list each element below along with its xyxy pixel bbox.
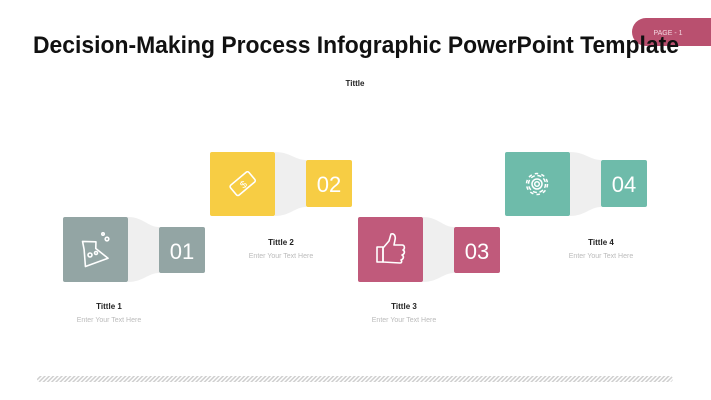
- text: step 4: [569, 238, 633, 260]
- text: step 3: [372, 302, 436, 324]
- text: step 4: Enter Your Text Here: [569, 253, 633, 260]
- text: step 1: Tittle 1: [96, 302, 122, 311]
- step 4: [505, 152, 647, 216]
- text: step 2: [249, 238, 313, 260]
- text: step 3: Tittle 3: [391, 302, 417, 311]
- page badge: [632, 18, 711, 46]
- icon: gear: [526, 174, 548, 194]
- text: step 2: Enter Your Text Here: [249, 253, 313, 260]
- step 4: 04: [612, 172, 636, 197]
- text: step 3: Enter Your Text Here: [372, 317, 436, 324]
- step 3: [358, 217, 500, 282]
- subtitle: Tittle: [346, 79, 365, 88]
- text: step 2: Tittle 2: [268, 238, 294, 247]
- text: step 4: Tittle 4: [588, 238, 614, 247]
- step 1: 01: [170, 239, 194, 264]
- text: step 1: [77, 302, 141, 324]
- page badge: PAGE - 1: [653, 30, 683, 37]
- icon: money: $: [238, 179, 250, 191]
- step 2: 02: [317, 172, 341, 197]
- icon: thumbs up: [377, 234, 404, 263]
- icon: money: [229, 171, 256, 196]
- icon: flask: [75, 233, 109, 268]
- title: Decision-Making Process Infographic PowerPoint Template: [33, 32, 679, 59]
- step 2: [210, 152, 352, 216]
- step 3: 03: [465, 239, 489, 264]
- text: step 1: Enter Your Text Here: [77, 317, 141, 324]
- step 1: [63, 217, 205, 282]
